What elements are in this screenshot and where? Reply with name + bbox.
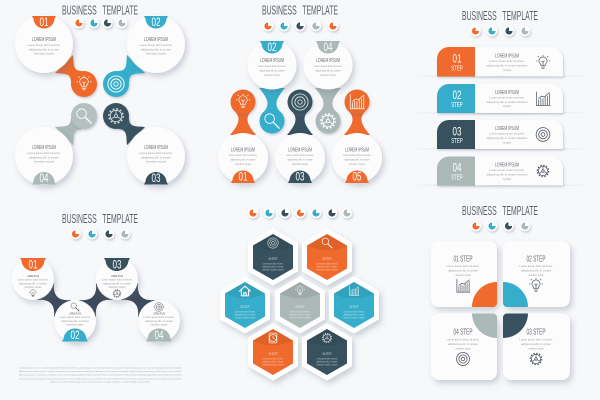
row 04: turpis bbox=[503, 177, 512, 181]
hexagon 3: house: adipiscing elit, in ornare bbox=[234, 314, 256, 316]
legend dots bbox=[74, 18, 127, 28]
panel: hexagon cluster bbox=[222, 208, 378, 379]
hexagon 6: clock: adipiscing elit, in ornare bbox=[262, 360, 284, 364]
icon circle: chart bbox=[344, 90, 370, 114]
hexagon 3: house: Lorem ipsum dolor sit amet, bbox=[234, 310, 256, 314]
square 04 content: 04 STEP bbox=[454, 328, 472, 336]
row 03: adipiscing elit, in ornare interdum bbox=[486, 136, 528, 140]
hexagon 6: clock: 00 STEP bbox=[268, 352, 278, 356]
text: circle 01: adipiscing elit, in ornare bbox=[29, 48, 59, 52]
text: circle 01 bbox=[229, 148, 257, 166]
icon circle: search bbox=[71, 103, 97, 129]
tab 02: 02 bbox=[70, 330, 80, 342]
row 01: 01 bbox=[452, 54, 462, 66]
square 02 content: 02 STEP bbox=[526, 254, 546, 264]
text and icon: circle 03: LOREM IPSUM bbox=[111, 274, 123, 278]
text and icon: circle 02: Lorem ipsum dolor sit amet, bbox=[60, 315, 91, 319]
text: circle 04: adipiscing elit, in ornare bbox=[29, 156, 59, 160]
legend dots bbox=[471, 221, 530, 231]
text and icon: circle 03: adipiscing elit, in ornare bbox=[103, 282, 131, 286]
text: circle 02: interdum turpis bbox=[264, 73, 281, 77]
text: circle 05: interdum turpis bbox=[349, 162, 366, 166]
row 01: turpis bbox=[503, 68, 512, 72]
row 03: STEP bbox=[451, 136, 463, 145]
square 02 content: interdum turpis bbox=[528, 273, 544, 277]
hexagon 4: bulb: 00 STEP bbox=[296, 305, 305, 309]
hexagon 6: clock: interdum turpis ut amet bbox=[262, 364, 284, 366]
square 01 content: adipiscing elit, in ornare bbox=[448, 268, 478, 272]
text: circle 02: Lorem ipsum dolor sit amet, bbox=[140, 43, 173, 47]
tab 01: 01 bbox=[40, 17, 48, 29]
row 01: adipiscing elit, in ornare interdum bbox=[486, 64, 528, 68]
text: circle 02 bbox=[140, 37, 173, 56]
text: circle 04: LOREM IPSUM bbox=[32, 145, 56, 151]
row 02: 02 bbox=[452, 90, 462, 102]
hexagon 4: bulb: adipiscing elit, in ornare bbox=[290, 314, 311, 316]
tab 04 bbox=[146, 328, 172, 342]
text: circle 03 bbox=[140, 145, 173, 164]
text: circle 04: Lorem ipsum dolor sit amet, bbox=[28, 151, 61, 155]
tab 04 bbox=[316, 41, 340, 54]
row 02: Lorem ipsum dolor sit amet, bbox=[490, 96, 525, 100]
hexagon 1: target bbox=[253, 234, 293, 280]
text: circle 05 bbox=[343, 148, 371, 166]
text and icon: circle 01: Lorem ipsum dolor sit amet, bbox=[18, 278, 49, 282]
text: circle 01: interdum turpis bbox=[235, 162, 252, 166]
row 04: Lorem ipsum dolor sit amet, bbox=[490, 168, 525, 172]
square 04 content: Lorem ipsum dolor sit amet, bbox=[446, 338, 480, 342]
hexagon 2: search: interdum turpis ut amet bbox=[316, 268, 338, 272]
text: circle 04 bbox=[28, 145, 61, 164]
title: BUSINESS TEMPLATE bbox=[62, 212, 138, 226]
row 04: 04 bbox=[452, 162, 462, 174]
tab 04 bbox=[32, 172, 56, 185]
hexagon 1: target: interdum turpis ut amet bbox=[262, 268, 284, 272]
text: circle 03: adipiscing elit, in ornare bbox=[288, 158, 313, 162]
tab 03: 03 bbox=[112, 260, 122, 272]
icon circle: bulb bbox=[230, 90, 256, 114]
tab 03 bbox=[144, 172, 168, 185]
quarter: grey bbox=[472, 314, 497, 338]
legend dots bbox=[470, 26, 530, 36]
text: circle 01: LOREM IPSUM bbox=[32, 37, 56, 43]
square 04 content bbox=[446, 328, 480, 365]
tab 01 bbox=[231, 170, 255, 184]
text and icon: circle 01: interdum turpis bbox=[24, 285, 42, 289]
tab 03 bbox=[288, 170, 312, 184]
hexagon 1: target: adipiscing elit, in ornare bbox=[262, 266, 284, 268]
hexagon 5: chart: Lorem ipsum dolor sit amet, bbox=[344, 310, 365, 314]
connectors bbox=[55, 55, 145, 145]
text: circle 03 bbox=[286, 148, 314, 166]
square 04 content: interdum turpis bbox=[456, 346, 471, 350]
row 04: STEP bbox=[451, 172, 463, 182]
quarter: orange bbox=[472, 282, 497, 307]
text: circle 02: LOREM IPSUM bbox=[260, 58, 284, 64]
paragraph: Lorem ipsum dolor sit amet, consectetur adipiscing elit. Nulla vitae elit libero, a pharetra augue. Donec ullamcorper nulla non metus auctor fringilla. Integer posuere erat a ante venenatis dapibus posuere velit aliquet. bbox=[19, 366, 182, 370]
text and icon: circle 03 bbox=[102, 274, 133, 297]
text: circle 05: LOREM IPSUM bbox=[345, 148, 369, 154]
hexagon 4: bulb: Lorem ipsum dolor sit amet, bbox=[290, 310, 311, 314]
title: BUSINESS TEMPLATE bbox=[62, 4, 138, 18]
icon circle: search bbox=[260, 108, 284, 134]
text: circle 02: interdum turpis bbox=[146, 52, 167, 56]
paragraph: Maecenas faucibus mollis interdum. Cras mattis consectetur purus sit amet fermentum. Aenean lacinia bibendum nulla sed consectetur. Vestibulum id ligula porta felis euismod semper. Nullam quis risus eget urna mollis. bbox=[19, 370, 182, 373]
row 03: LOREM IPSUM bbox=[495, 126, 519, 132]
hexagon 7: gear bbox=[307, 329, 347, 374]
row 01: Lorem ipsum dolor sit amet, bbox=[490, 59, 525, 63]
hexagon 7: gear: interdum turpis ut amet bbox=[316, 364, 338, 366]
row 03 bbox=[413, 120, 589, 150]
tab 04: 04 bbox=[324, 42, 333, 54]
hexagon 1: target: Lorem ipsum dolor sit amet, bbox=[262, 262, 284, 266]
text: circle 02: LOREM IPSUM bbox=[144, 37, 168, 43]
tab 03 bbox=[104, 258, 130, 272]
text and icon: circle 01 bbox=[18, 274, 49, 297]
text and icon: circle 02: LOREM IPSUM bbox=[69, 312, 81, 316]
row 04: adipiscing elit, in ornare interdum bbox=[486, 172, 528, 176]
row 01: STEP bbox=[451, 64, 463, 72]
text: circle 01 bbox=[28, 37, 61, 56]
text: circle 03: LOREM IPSUM bbox=[288, 148, 312, 154]
hexagon 3: house bbox=[225, 282, 265, 328]
hexagon 5: chart: adipiscing elit, in ornare bbox=[344, 314, 365, 316]
hexagon 3: house: interdum turpis ut amet bbox=[234, 316, 256, 320]
square 01 content: interdum turpis bbox=[456, 273, 471, 277]
row 01: LOREM IPSUM bbox=[495, 54, 519, 60]
hexagon 7: gear: Lorem ipsum dolor sit amet, bbox=[316, 358, 338, 360]
title: BUSINESS TEMPLATE bbox=[462, 204, 538, 218]
text and icon: circle 04 bbox=[144, 303, 175, 326]
row 02: LOREM IPSUM bbox=[495, 90, 519, 96]
icon circle: bulb bbox=[71, 71, 97, 97]
square 02 content bbox=[520, 254, 553, 291]
paragraph: Praesent commodo cursus magna, vel scelerisque nisl consectetur et. Fusce dapibus, tellus ac cursus commodo, tortor mauris condimentum nibh, ut fermentum massa justo sit amet risus. Donec id elit non mi porta gravida. bbox=[19, 378, 182, 380]
square 02 content: adipiscing elit, in ornare bbox=[521, 268, 551, 272]
text: circle 05: Lorem ipsum dolor sit amet, bbox=[343, 153, 371, 157]
text: circle 04: interdum turpis bbox=[34, 160, 55, 164]
text and icon: circle 02: adipiscing elit, in ornare bbox=[61, 319, 89, 323]
text: circle 02 bbox=[258, 58, 286, 77]
text: circle 04: adipiscing elit, in ornare bbox=[316, 68, 341, 72]
text and icon: circle 03: interdum turpis bbox=[108, 285, 126, 289]
text: circle 01: Lorem ipsum dolor sit amet, bbox=[28, 43, 61, 47]
row 03: Lorem ipsum dolor sit amet, bbox=[490, 132, 525, 136]
text: circle 03: LOREM IPSUM bbox=[144, 145, 168, 151]
legend dots bbox=[70, 229, 130, 239]
panel: four rounded squares bbox=[431, 204, 570, 380]
square 01 content bbox=[446, 254, 480, 292]
hexagon 7: gear: adipiscing elit, in ornare bbox=[316, 360, 338, 364]
square 01 content: 01 STEP bbox=[454, 254, 472, 264]
row 02: STEP bbox=[451, 100, 463, 109]
text: circle 03: Lorem ipsum dolor sit amet, bbox=[140, 151, 173, 155]
text: circle 03: interdum turpis bbox=[146, 160, 167, 164]
large circles bbox=[218, 40, 382, 183]
tab 02 bbox=[144, 16, 168, 29]
hexagon 5: chart: 00 STEP bbox=[350, 305, 359, 309]
connectors bbox=[37, 283, 155, 317]
text and icon: circle 04: adipiscing elit, in ornare bbox=[145, 319, 173, 323]
hexagon 2: search: Lorem ipsum dolor sit amet, bbox=[316, 262, 338, 266]
square 03 content: 03 STEP bbox=[526, 328, 546, 336]
hexagon 6: clock bbox=[253, 329, 293, 374]
text: circle 04: interdum turpis bbox=[320, 73, 337, 77]
text and icon: circle 04: Lorem ipsum dolor sit amet, bbox=[144, 315, 175, 319]
tab 02 bbox=[260, 41, 284, 54]
squares bbox=[431, 241, 570, 380]
hexagon 7: gear: 00 STEP bbox=[322, 352, 332, 356]
tab 02 bbox=[62, 328, 88, 342]
tab 03: 03 bbox=[152, 173, 160, 185]
circles bbox=[12, 258, 180, 342]
row 03: turpis bbox=[503, 140, 512, 144]
square 03 content: Lorem ipsum dolor sit amet, bbox=[520, 338, 553, 342]
tab 04: 04 bbox=[40, 173, 49, 185]
text: circle 01: LOREM IPSUM bbox=[231, 148, 255, 154]
text and icon: circle 04: interdum turpis bbox=[150, 322, 168, 326]
row 01 bbox=[413, 47, 589, 77]
large circles bbox=[15, 15, 185, 185]
text: circle 01: interdum turpis bbox=[34, 52, 55, 56]
text and icon: circle 02 bbox=[60, 303, 91, 326]
title: BUSINESS TEMPLATE bbox=[262, 4, 338, 18]
hexagon 6: clock: Lorem ipsum dolor sit amet, bbox=[262, 358, 284, 360]
text: circle 02: adipiscing elit, in ornare bbox=[260, 68, 285, 72]
legend dots bbox=[248, 208, 352, 218]
square 03 content: interdum turpis bbox=[528, 346, 544, 350]
panel: five circles pillars bbox=[218, 4, 382, 184]
icon circle: target bbox=[288, 90, 312, 114]
quarter: dark bbox=[503, 314, 528, 338]
necks bbox=[230, 88, 370, 135]
text: circle 01: adipiscing elit, in ornare bbox=[230, 158, 256, 162]
legend dots bbox=[263, 21, 338, 31]
text: circle 04 bbox=[314, 58, 342, 77]
text: circle 02: Lorem ipsum dolor sit amet, bbox=[258, 64, 286, 68]
panel: four step rows bbox=[413, 9, 589, 186]
hexagon 1: target: 00 STEP bbox=[268, 257, 278, 261]
title: BUSINESS TEMPLATE bbox=[462, 9, 538, 23]
tab 05: 05 bbox=[352, 172, 362, 184]
tab 05 bbox=[345, 170, 369, 184]
paragraph: Aenean eu leo quam. Pellentesque ornare sem lacinia quam venenatis vestibulum. Curabitur blandit tempus porttitor. bbox=[50, 380, 151, 384]
hexagon 2: search: adipiscing elit, in ornare bbox=[316, 266, 338, 268]
tab 01 bbox=[32, 16, 56, 29]
paragraph bbox=[19, 366, 182, 384]
text and icon: circle 04: LOREM IPSUM bbox=[153, 312, 165, 316]
text: circle 02: adipiscing elit, in ornare bbox=[141, 48, 171, 52]
tab 02: 02 bbox=[152, 17, 160, 29]
row 04 bbox=[413, 156, 589, 186]
square 04 content: adipiscing elit, in ornare bbox=[448, 342, 478, 346]
text and icon: circle 01: LOREM IPSUM bbox=[27, 274, 39, 278]
tab 03: 03 bbox=[296, 172, 304, 184]
text: circle 03: adipiscing elit, in ornare bbox=[141, 156, 171, 160]
row 03: 03 bbox=[452, 126, 462, 138]
square 02 content: Lorem ipsum dolor sit amet, bbox=[520, 264, 553, 268]
row 02 bbox=[413, 84, 589, 114]
text: circle 05: adipiscing elit, in ornare bbox=[344, 158, 370, 162]
icon circle: gear bbox=[103, 103, 129, 129]
tab 01: 01 bbox=[238, 172, 248, 184]
hexagon 4: bulb bbox=[280, 282, 320, 328]
icon circle: target bbox=[103, 71, 129, 97]
hexagon 4: bulb: interdum turpis ut amet bbox=[290, 316, 311, 320]
tab 04: 04 bbox=[154, 330, 164, 342]
tab 01: 01 bbox=[28, 260, 38, 272]
panel: zigzag chain bbox=[12, 212, 182, 384]
hexagon 2: search bbox=[307, 234, 347, 280]
quarter: blue bbox=[503, 282, 528, 307]
square 01 content: Lorem ipsum dolor sit amet, bbox=[446, 264, 480, 268]
text: circle 03: interdum turpis bbox=[292, 162, 309, 166]
icon circle: gear bbox=[316, 108, 340, 134]
text and icon: circle 02: interdum turpis bbox=[66, 322, 84, 326]
panel: four circles with connectors bbox=[15, 4, 185, 185]
hexagon 5: chart bbox=[334, 282, 374, 328]
hexagon 2: search: 00 STEP bbox=[322, 257, 332, 261]
white hexagon frames bbox=[222, 230, 378, 379]
square 03 content: adipiscing elit, in ornare bbox=[521, 342, 551, 346]
text: circle 04: LOREM IPSUM bbox=[316, 58, 340, 64]
text: circle 04: Lorem ipsum dolor sit amet, bbox=[314, 64, 342, 68]
square 03 content bbox=[520, 328, 553, 365]
tab 01 bbox=[20, 258, 46, 272]
paragraph: Morbi leo risus, porta ac consectetur ac, vestibulum at eros. Cum sociis natoque penatibus et magnis dis parturient montes, nascetur ridiculus mus. Etiam porta sem malesuada magna mollis euismod. Sed posuere consectetur. bbox=[19, 374, 182, 376]
text and icon: circle 01: adipiscing elit, in ornare bbox=[19, 282, 47, 286]
tab 02: 02 bbox=[268, 42, 276, 54]
text: circle 01: Lorem ipsum dolor sit amet, bbox=[229, 153, 257, 157]
text and icon: circle 03: Lorem ipsum dolor sit amet, bbox=[102, 278, 133, 282]
row 04: LOREM IPSUM bbox=[495, 162, 519, 168]
hexagon 5: chart: interdum turpis ut amet bbox=[344, 316, 365, 320]
text: circle 03: Lorem ipsum dolor sit amet, bbox=[286, 153, 314, 157]
row 02: turpis bbox=[503, 104, 512, 108]
hexagon 3: house: 00 STEP bbox=[240, 305, 250, 309]
row 02: adipiscing elit, in ornare interdum bbox=[486, 100, 528, 104]
